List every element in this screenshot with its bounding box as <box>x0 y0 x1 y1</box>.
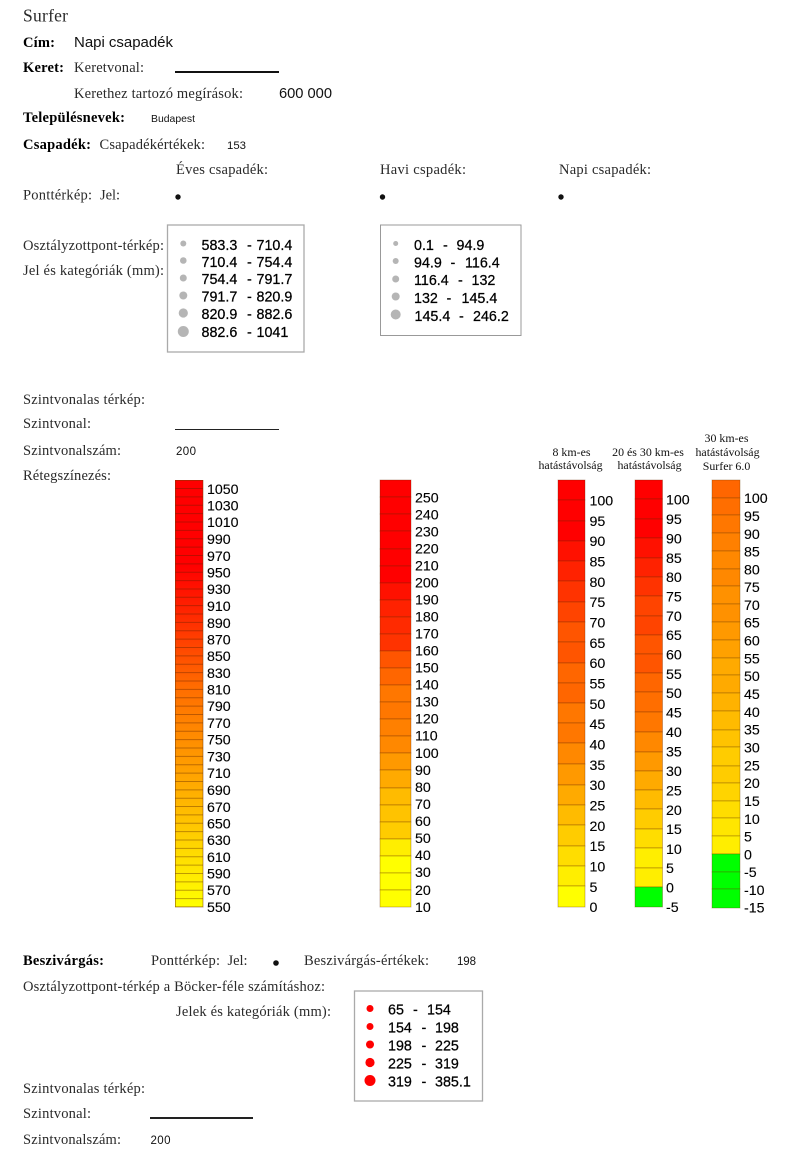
heading: 30 km Surfer 6.0: 30 km-es <box>705 431 749 445</box>
row: településnevek: Településnevek: <box>23 110 125 126</box>
color scale: 30 km Surfer 6.0: 95 <box>744 509 760 525</box>
legend: beszivárgás: 154 <box>427 1002 451 1018</box>
color scale: 20 és 30 km: 75 <box>666 590 682 606</box>
legend: éves csapadék: - <box>247 272 252 288</box>
color scale: 30 km Surfer 6.0: 10 <box>744 812 760 828</box>
heading: 8 km: hatástávolság <box>538 458 603 472</box>
color scale: havi csapadék: 170 <box>415 626 439 642</box>
legend: éves csapadék: 882.6 <box>256 307 292 323</box>
color scale: 8 km <box>558 480 613 916</box>
legend: beszivárgás: 198 <box>435 1020 459 1036</box>
color scale: éves csapadék <box>175 480 239 916</box>
row: keret: Keretvonal: <box>74 60 144 76</box>
color scale: 30 km Surfer 6.0: 65 <box>744 616 760 632</box>
color scale: 8 km: 15 <box>590 839 605 855</box>
color scale: éves csapadék: 990 <box>207 532 231 548</box>
legend: éves csapadék: 710.4 <box>256 238 292 254</box>
legend: beszivárgás: 65 <box>388 1002 404 1018</box>
color scale: 20 és 30 km: 85 <box>666 551 682 567</box>
color scale: 30 km Surfer 6.0: 20 <box>744 776 760 792</box>
color scale: éves csapadék: 770 <box>207 716 231 732</box>
color scale: éves csapadék: 710 <box>207 766 231 782</box>
legend: beszivárgás: 319 <box>388 1074 412 1090</box>
color scale: 20 és 30 km: 45 <box>666 706 682 722</box>
color scale: 20 és 30 km: -5 <box>666 900 679 916</box>
color scale: 30 km Surfer 6.0: -15 <box>744 900 765 916</box>
color scale: éves csapadék: 910 <box>207 599 231 615</box>
color scale: 30 km Surfer 6.0: 100 <box>744 491 768 507</box>
color scale: havi csapadék: 110 <box>415 728 438 744</box>
column headings <box>176 161 651 178</box>
color scale: 30 km Surfer 6.0: 25 <box>744 758 760 774</box>
color scale: 20 és 30 km: 10 <box>666 842 682 858</box>
color scale: 8 km: 0 <box>590 900 598 916</box>
color scale: 30 km Surfer 6.0: 85 <box>744 544 760 560</box>
color scale: 20 és 30 km: 60 <box>666 648 682 664</box>
color scale: éves csapadék: 890 <box>207 616 231 632</box>
legend: beszivárgás: - <box>422 1020 426 1036</box>
color scale: éves csapadék: 750 <box>207 732 231 748</box>
legend: éves csapadék: 754.4 <box>256 255 292 271</box>
color scale: 8 km: 30 <box>590 778 605 794</box>
color scale: 20 és 30 km: 90 <box>666 532 682 548</box>
legend: havi csapadék: 116.4 <box>465 256 500 272</box>
legend: beszivárgás: 385.1 <box>435 1074 471 1090</box>
column headings: Éves csapadék: <box>176 161 268 178</box>
color scale: havi csapadék: 70 <box>415 797 431 813</box>
row: cím: Cím: <box>23 35 55 51</box>
heading: 30 km Surfer 6.0 <box>695 431 760 473</box>
legend: havi csapadék: 145.4 <box>414 309 450 325</box>
row: beszivárgás: Ponttérkép: <box>151 953 220 969</box>
color scale: havi csapadék: 250 <box>415 490 439 506</box>
color scale: havi csapadék: 120 <box>415 712 439 728</box>
color scale: 30 km Surfer 6.0: 80 <box>744 562 760 578</box>
heading: 8 km: 8 km-es <box>553 445 591 459</box>
labels: osztályzottpont-térkép Böcker <box>23 979 331 1020</box>
heading: 20 és 30 km <box>612 445 684 472</box>
color scale: 20 és 30 km: 25 <box>666 784 682 800</box>
color scale: 30 km Surfer 6.0: -5 <box>744 865 757 881</box>
color scale: éves csapadék: 550 <box>207 900 231 916</box>
color scale: 8 km: 65 <box>590 636 605 652</box>
color scale: éves csapadék: 950 <box>207 566 231 582</box>
legend: éves csapadék: 882.6 <box>202 325 237 341</box>
row: településnevek: Budapest <box>151 114 195 125</box>
legend: beszivárgás: - <box>422 1056 426 1072</box>
labels: osztályzottpont-térkép Böcker: Osztályzottpont-térkép a Böcker-féle számításhoz: <box>23 979 325 995</box>
row: ponttérkép jel: Ponttérkép: <box>23 188 92 204</box>
labels: szintvonalas térkép (beszivárgás): 200 <box>150 1135 170 1147</box>
labels: szintvonalas térkép: Szintvonalszám: <box>23 443 121 459</box>
legend: beszivárgás: 154 <box>388 1020 412 1036</box>
row: ponttérkép jel <box>23 188 564 204</box>
legend: éves csapadék: 583.3 <box>202 238 237 254</box>
labels: szintvonalas térkép: Szintvonalas térkép: <box>23 392 145 408</box>
color scale: 20 és 30 km: 55 <box>666 667 682 683</box>
labels: osztályzottpont-térkép <box>23 238 164 279</box>
legend: éves csapadék: - <box>247 325 252 341</box>
labels: osztályzottpont-térkép: Osztályzottpont-térkép: <box>23 238 164 254</box>
color scale: 20 és 30 km: 35 <box>666 744 682 760</box>
legend: éves csapadék: 791.7 <box>202 290 237 306</box>
legend: éves csapadék: 820.9 <box>202 307 237 323</box>
color scale: 30 km Surfer 6.0: 5 <box>744 830 752 846</box>
color scale: 30 km Surfer 6.0: 15 <box>744 794 760 810</box>
legend: éves csapadék: 710.4 <box>202 255 237 271</box>
legend: éves csapadék: 820.9 <box>256 290 292 306</box>
color scale: 8 km: 75 <box>590 595 605 611</box>
row: beszivárgás: Beszivárgás-értékek: <box>304 953 429 969</box>
legend: havi csapadék: 94.9 <box>456 238 484 254</box>
color scale: 30 km Surfer 6.0: 70 <box>744 598 760 614</box>
row: csapadék: Csapadékértékek: <box>100 137 205 153</box>
column headings: Napi csapadék: <box>559 162 651 178</box>
color scale: 30 km Surfer 6.0: 55 <box>744 652 760 668</box>
legend: havi csapadék: - <box>459 309 464 325</box>
color scale: havi csapadék: 160 <box>415 644 439 660</box>
color scale: havi csapadék: 180 <box>415 610 439 626</box>
legend: beszivárgás <box>354 991 482 1101</box>
color scale: 8 km: 80 <box>590 575 605 591</box>
color scale: 8 km: 20 <box>590 819 605 835</box>
heading: 8 km <box>538 445 603 472</box>
color scale: 20 és 30 km: 65 <box>666 628 682 644</box>
legend: éves csapadék <box>168 225 304 352</box>
color scale: éves csapadék: 730 <box>207 750 231 766</box>
legend: beszivárgás: 225 <box>388 1056 412 1072</box>
color scale: 30 km Surfer 6.0: 60 <box>744 634 760 650</box>
color scale: 8 km: 5 <box>590 880 598 896</box>
color scale: 20 és 30 km: 100 <box>666 492 690 508</box>
legend: havi csapadék: 116.4 <box>414 273 449 289</box>
row: keret <box>23 60 279 76</box>
color scale: 20 és 30 km: 0 <box>666 880 674 896</box>
color scale: 8 km: 25 <box>590 798 605 814</box>
legend: havi csapadék: 132 <box>472 273 495 289</box>
row: cím: Napi csapadék <box>74 34 174 51</box>
color scale: 8 km: 85 <box>590 554 605 570</box>
legend: beszivárgás: 225 <box>435 1038 459 1054</box>
labels: szintvonalas térkép: Rétegszínezés: <box>23 468 111 484</box>
legend: éves csapadék: - <box>247 290 252 306</box>
color scale: 20 és 30 km: 5 <box>666 861 674 877</box>
color scale: 20 és 30 km: 70 <box>666 609 682 625</box>
color scale: 20 és 30 km: 15 <box>666 822 682 838</box>
color scale: éves csapadék: 590 <box>207 866 231 882</box>
color scale: éves csapadék: 870 <box>207 632 231 648</box>
color scale: havi csapadék: 230 <box>415 524 439 540</box>
row: csapadék: 153 <box>227 140 246 152</box>
column headings: Havi cspadék: <box>380 162 466 178</box>
color scale: 20 és 30 km: 95 <box>666 512 682 528</box>
legend: éves csapadék: 754.4 <box>202 272 237 288</box>
heading: 30 km Surfer 6.0: Surfer 6.0 <box>703 459 750 473</box>
color scale: éves csapadék: 830 <box>207 666 231 682</box>
legend: éves csapadék: - <box>247 255 252 271</box>
row: kerethez tartozó megírások: 600 000 <box>279 86 332 102</box>
labels: szintvonalas térkép: 200 <box>176 446 196 458</box>
row: beszivárgás: 198 <box>457 956 476 968</box>
color scale: 20 és 30 km: 40 <box>666 725 682 741</box>
legend: beszivárgás: 198 <box>388 1038 412 1054</box>
labels: szintvonalas térkép (beszivárgás): Szintvonalszám: <box>23 1132 121 1148</box>
legend: havi csapadék: - <box>443 238 448 254</box>
labels: szintvonalas térkép <box>23 392 279 484</box>
labels: szintvonalas térkép (beszivárgás): Szintvonal: <box>23 1106 91 1122</box>
row: beszivárgás: Beszivárgás: <box>23 953 104 969</box>
color scale: havi csapadék: 190 <box>415 592 439 608</box>
color scale: 20 és 30 km: 30 <box>666 764 682 780</box>
legend: havi csapadék: 145.4 <box>462 291 497 307</box>
color scale: havi csapadék: 50 <box>415 831 431 847</box>
color scale: 20 és 30 km: 20 <box>666 803 682 819</box>
color scale: éves csapadék: 670 <box>207 800 231 816</box>
heading: 20 és 30 km: hatástávolság <box>617 458 682 472</box>
color scale: havi csapadék: 20 <box>415 883 431 899</box>
color scale: 8 km: 100 <box>590 494 613 510</box>
legend: havi csapadék: 246.2 <box>473 309 509 325</box>
color scale: 8 km: 60 <box>590 656 605 672</box>
color scale: 30 km Surfer 6.0: 50 <box>744 669 760 685</box>
legend: havi csapadék: 132 <box>414 291 438 307</box>
color scale: éves csapadék: 630 <box>207 833 231 849</box>
legend: éves csapadék: - <box>247 307 252 323</box>
color scale: havi csapadék <box>380 480 439 916</box>
row: csapadék: Csapadék: <box>23 137 91 153</box>
color scale: havi csapadék: 80 <box>415 780 431 796</box>
color scale: 8 km: 55 <box>590 676 605 692</box>
color scale: 8 km: 95 <box>590 514 605 530</box>
legend: beszivárgás: 319 <box>435 1056 459 1072</box>
row: településnevek <box>23 110 195 126</box>
color scale: 30 km Surfer 6.0: 90 <box>744 527 760 543</box>
labels: szintvonalas térkép (beszivárgás): Szintvonalas térkép: <box>23 1081 145 1097</box>
title: Surfer <box>23 6 68 26</box>
color scale: havi csapadék: 150 <box>415 660 439 676</box>
color scale: éves csapadék: 1050 <box>207 482 239 498</box>
color scale: havi csapadék: 220 <box>415 542 439 558</box>
color scale: 8 km: 50 <box>590 697 605 713</box>
color scale: 20 és 30 km: 50 <box>666 686 682 702</box>
color scale: éves csapadék: 690 <box>207 783 231 799</box>
legend: éves csapadék: - <box>247 238 252 254</box>
color scale: havi csapadék: 10 <box>415 900 431 916</box>
row: kerethez tartozó megírások <box>74 86 332 102</box>
color scale: éves csapadék: 1010 <box>207 515 239 531</box>
color scale: havi csapadék: 130 <box>415 694 439 710</box>
row: keret: Keret: <box>23 60 64 76</box>
legend: havi csapadék <box>380 225 521 336</box>
legend: havi csapadék: - <box>450 256 456 272</box>
labels: osztályzottpont-térkép: Jel és kategóriák (mm): <box>23 263 164 279</box>
color scale: éves csapadék: 570 <box>207 883 231 899</box>
labels: szintvonalas térkép (beszivárgás) <box>23 1081 253 1148</box>
labels: osztályzottpont-térkép Böcker: Jelek és kategóriák (mm): <box>176 1004 331 1020</box>
color scale: 30 km Surfer 6.0 <box>712 480 768 916</box>
color scale: 30 km Surfer 6.0: 40 <box>744 705 760 721</box>
color scale: havi csapadék: 210 <box>415 558 439 574</box>
legend: beszivárgás: - <box>422 1038 426 1054</box>
legend: havi csapadék: 0.1 <box>414 238 434 254</box>
heading: 20 és 30 km: 20 és 30 km-es <box>612 445 684 459</box>
color scale: 20 és 30 km: 80 <box>666 570 682 586</box>
color scale: havi csapadék: 140 <box>415 678 439 694</box>
color scale: 30 km Surfer 6.0: 0 <box>744 848 752 864</box>
color scale: 8 km: 45 <box>590 717 605 733</box>
heading: 30 km Surfer 6.0: hatástávolság <box>695 445 760 459</box>
row: kerethez tartozó megírások: Kerethez tartozó megírások: <box>74 86 243 102</box>
color scale: éves csapadék: 1030 <box>207 498 239 514</box>
color scale: 30 km Surfer 6.0: -10 <box>744 883 765 899</box>
color scale: éves csapadék: 930 <box>207 582 231 598</box>
color scale: 30 km Surfer 6.0: 45 <box>744 687 760 703</box>
row: cím <box>23 34 174 51</box>
row: beszivárgás <box>23 953 476 969</box>
legend: éves csapadék: 791.7 <box>256 272 292 288</box>
color scale: éves csapadék: 650 <box>207 816 231 832</box>
color scale: éves csapadék: 850 <box>207 649 231 665</box>
color scale: éves csapadék: 970 <box>207 549 231 565</box>
color scale: havi csapadék: 200 <box>415 576 439 592</box>
legend: havi csapadék: - <box>458 273 463 289</box>
row: csapadék <box>23 137 246 153</box>
color scale: 20 és 30 km <box>635 480 690 916</box>
row: beszivárgás: Jel: <box>228 953 248 969</box>
color scale: havi csapadék: 100 <box>415 746 439 762</box>
color scale: éves csapadék: 610 <box>207 850 231 866</box>
color scale: havi csapadék: 90 <box>415 763 431 779</box>
legend: beszivárgás: - <box>422 1074 426 1090</box>
legend: éves csapadék: 1041 <box>256 325 288 341</box>
color scale: havi csapadék: 40 <box>415 848 431 864</box>
color scale: 8 km: 10 <box>590 860 605 876</box>
labels: szintvonalas térkép: Szintvonal: <box>23 416 91 432</box>
color scale: havi csapadék: 30 <box>415 865 431 881</box>
color scale: 8 km: 35 <box>590 758 605 774</box>
color scale: 30 km Surfer 6.0: 30 <box>744 740 760 756</box>
color scale: 30 km Surfer 6.0: 35 <box>744 722 760 738</box>
legend: havi csapadék: 94.9 <box>414 256 442 272</box>
legend: beszivárgás: - <box>413 1002 418 1018</box>
color scale: éves csapadék: 810 <box>207 682 231 698</box>
color scale: éves csapadék: 790 <box>207 699 231 715</box>
color scale: havi csapadék: 240 <box>415 508 439 524</box>
legend: havi csapadék: - <box>446 291 452 307</box>
color scale: 8 km: 40 <box>590 738 605 754</box>
color scale: 8 km: 70 <box>590 616 605 632</box>
row: ponttérkép jel: Jel: <box>100 188 120 204</box>
color scale: 30 km Surfer 6.0: 75 <box>744 580 760 596</box>
color scale: 8 km: 90 <box>590 534 605 550</box>
color scale: havi csapadék: 60 <box>415 814 431 830</box>
